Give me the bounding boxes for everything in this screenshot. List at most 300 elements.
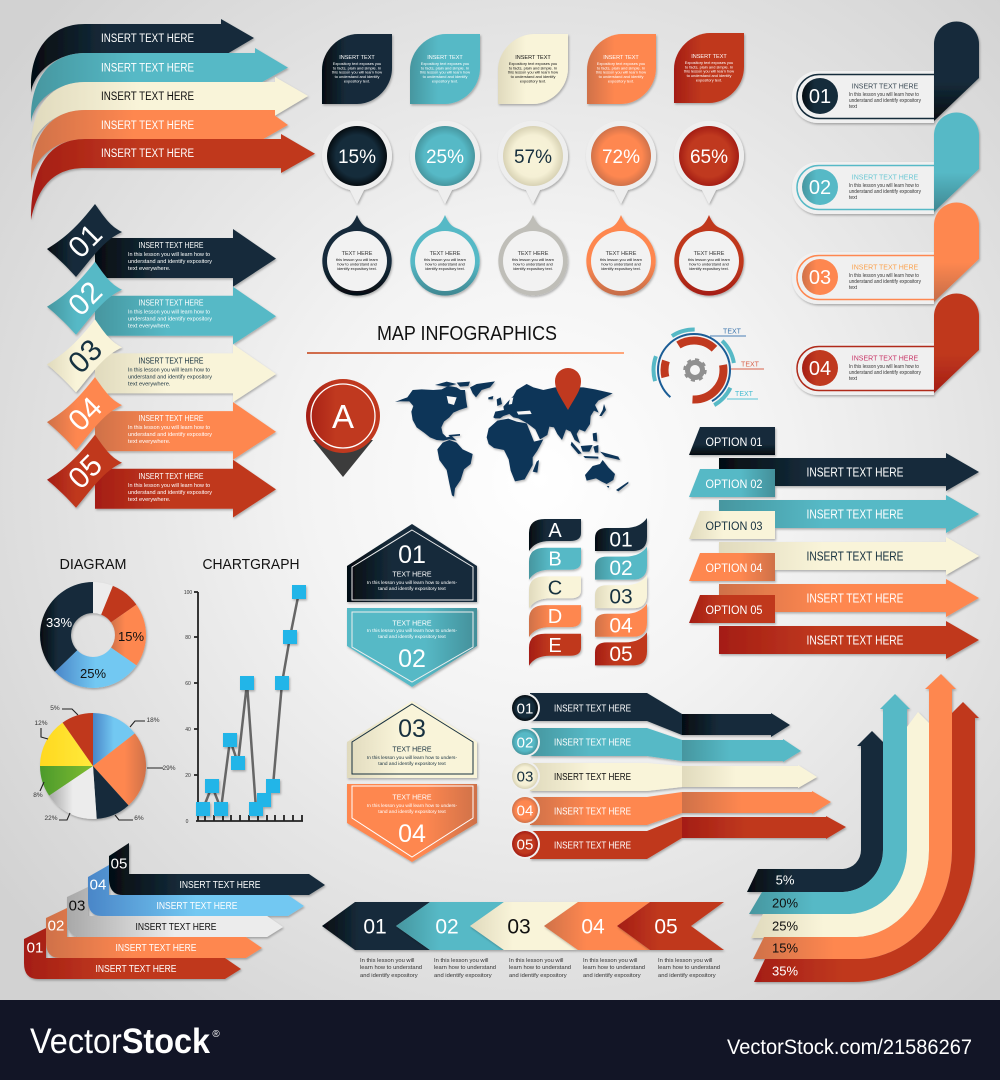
pie chart: 6%: [134, 815, 144, 822]
chevron 04: and identify expository: [583, 973, 641, 979]
ribbon 02: 02: [609, 557, 633, 580]
leaf cards row: [322, 33, 744, 104]
tag card 01: text: [849, 104, 858, 110]
hexagon 04: tand and identify expository text: [378, 809, 446, 815]
chevron 01: [322, 902, 430, 979]
folded arrow 05: 05: [111, 856, 127, 872]
option 01 tab: [689, 427, 775, 455]
leaf card orange: INSERT TEXT: [603, 55, 639, 61]
leaf card red: expository text.: [696, 78, 722, 83]
curved arrows top left: [31, 19, 315, 220]
donut chart: [40, 582, 146, 688]
pin 72%: [586, 121, 656, 204]
numbered arrow 04: In this lesson you will learn how to: [128, 425, 210, 431]
leaf card navy: to facts, plain and simple. In: [333, 65, 381, 70]
chevron 05: [617, 902, 724, 979]
hexagon 04: In this lesson you will learn how to unders-: [367, 803, 457, 809]
donut chart: 33%: [46, 615, 72, 630]
up arrow cream 25%: [751, 712, 933, 938]
hexagon 04: [347, 784, 477, 862]
folded arrow 04: [88, 865, 304, 916]
ring callouts row: [322, 215, 744, 296]
hexagon 04: TEXT HERE: [392, 794, 432, 802]
heading: diagram: DIAGRAM: [60, 556, 126, 573]
leaf card cream: Expository text exposes you: [509, 61, 557, 66]
option 01 tab: OPTION 01: [706, 435, 763, 449]
folded arrow 05: INSERT TEXT HERE: [180, 879, 260, 891]
folded arrow 01: 01: [27, 940, 43, 956]
leaf card teal: [410, 34, 480, 104]
gauge diagram: [654, 328, 764, 410]
ring callout teal: how to understand and: [425, 262, 465, 266]
heading: chartgraph: CHARTGRAPH: [202, 556, 300, 573]
option arrow 1: INSERT TEXT HERE: [806, 466, 904, 480]
pie chart: 8%: [33, 792, 43, 799]
bar arrow 04: [510, 791, 831, 825]
bar arrow 02: [510, 727, 801, 762]
up arrow navy 5%: 5%: [776, 872, 795, 888]
numbered arrow 02: understand and identify expository: [128, 317, 212, 323]
up arrow orange 15%: 15%: [772, 940, 798, 956]
line chart: 40: [185, 727, 191, 733]
chevron 04: learn how to understand: [583, 965, 645, 971]
ribbon 01: 01: [609, 528, 633, 552]
stepped folded arrows bottom left: [24, 843, 325, 979]
numbered arrow 04: 04: [62, 391, 109, 438]
pin 72%: 72%: [602, 147, 640, 168]
up arrow teal 20%: [749, 694, 910, 914]
donut chart: 15%: [118, 629, 144, 644]
gauge label lines and text: TEXT: [723, 328, 742, 336]
ribbon 05: 05: [609, 643, 633, 666]
tag card 01: [792, 22, 979, 123]
stepped bar arrows: [510, 693, 846, 859]
arrow orange: [31, 110, 288, 185]
hexagon 03: TEXT HERE: [392, 746, 432, 754]
option 04 tab: OPTION 04: [706, 561, 763, 575]
numbered arrow 05: INSERT TEXT HERE: [138, 471, 204, 481]
ring callout red: how to understand and: [689, 262, 729, 266]
ring callout orange: [586, 215, 656, 296]
pin 25%: [410, 121, 480, 204]
numbered arrow 02: INSERT TEXT HERE: [138, 298, 204, 308]
arrow teal: INSERT TEXT HERE: [101, 62, 194, 74]
tag card 04: In this lesson you will learn how to: [849, 364, 919, 370]
option arrows right: [689, 427, 979, 659]
line chart: 20: [185, 773, 191, 779]
curved up arrows: [747, 674, 979, 982]
folded arrow 02: [46, 908, 262, 958]
leaf card cream: INSERT TEXT: [515, 55, 551, 61]
chevron 01: 01: [363, 916, 387, 938]
ribbon 01: [595, 518, 647, 552]
up arrow teal 20%: 20%: [772, 896, 798, 910]
world map: [395, 381, 628, 499]
option arrow 1: [719, 453, 979, 491]
leaf card orange: to facts, plain and simple. In: [597, 65, 645, 70]
donut chart: 25%: [80, 666, 106, 681]
gauge label lines and text: TEXT: [741, 362, 760, 368]
folded arrow 04: 04: [90, 876, 106, 894]
arrow orange: INSERT TEXT HERE: [101, 120, 194, 132]
bar arrow 03: 03: [517, 768, 533, 786]
numbered arrow 02: 02: [62, 275, 109, 322]
leaf card navy: Expository text exposes you: [333, 61, 381, 66]
leaf card navy: this lesson you will learn how: [332, 70, 382, 75]
numbered arrow 05: understand and identify expository: [128, 490, 212, 496]
chevron 02: In this lesson you will: [434, 958, 488, 964]
leaf card cream: expository text.: [520, 79, 546, 84]
arrow red: [31, 134, 315, 220]
ribbon E: [529, 634, 581, 666]
pin 57%: 57%: [514, 147, 552, 168]
line chart: 80: [185, 635, 191, 641]
tag card 03: understand and identify expository: [849, 279, 921, 285]
numbered arrows left: [47, 204, 276, 518]
hexagon 01: TEXT HERE: [392, 572, 432, 578]
up arrow orange 15%: [753, 674, 956, 959]
hexagon 01: In this lesson you will learn how to unders-: [367, 580, 457, 586]
chevron 02: [396, 902, 504, 979]
hexagon 04: 04: [398, 820, 426, 848]
numbered arrow 01: In this lesson you will learn how to: [128, 252, 210, 258]
tag card 04: [792, 294, 979, 395]
tag card 04: INSERT TEXT HERE: [852, 356, 919, 362]
ring callout navy: how to understand and: [337, 262, 377, 266]
up arrow cream 25%: 25%: [772, 918, 798, 934]
bar arrow 02: INSERT TEXT HERE: [554, 738, 631, 748]
tag card 01: In this lesson you will learn how to: [849, 92, 919, 98]
bar arrow 05: INSERT TEXT HERE: [554, 840, 631, 852]
chevron 01: learn how to understand: [360, 965, 422, 971]
map section title: MAP INFOGRAPHICS: [377, 323, 557, 345]
hexagon 03: In this lesson you will learn how to unders-: [367, 755, 457, 761]
leaf card teal: expository text.: [432, 79, 458, 84]
chevron timeline: [322, 902, 724, 979]
ring callout red: TEXT HERE: [694, 251, 725, 257]
ring callout grey: this lesson you will learn: [512, 257, 554, 262]
option 04 tab: [689, 553, 775, 581]
option 05 tab: [689, 595, 775, 623]
tag card 01: 01: [809, 86, 831, 108]
ribbon E: E: [548, 635, 562, 657]
arrow cream: [31, 77, 308, 155]
ribbon A: A: [548, 520, 562, 542]
option arrow 5: [719, 621, 979, 659]
leaf card teal: this lesson you will learn how: [420, 70, 470, 75]
option arrow 4: [719, 579, 979, 617]
option arrow 2 text and tab 03: [689, 508, 904, 539]
ring callout grey: [498, 215, 568, 296]
ring callout navy: [322, 215, 392, 296]
leaf card cream: to facts, plain and simple. In: [509, 65, 557, 70]
hexagon 02: [347, 608, 477, 687]
ribbon D: D: [548, 606, 562, 628]
chevron 05: learn how to understand: [658, 965, 720, 971]
ring callout orange: TEXT HERE: [606, 251, 637, 257]
chevron 05: 05: [654, 916, 678, 938]
leaf card navy: [322, 34, 392, 104]
tag card 03: INSERT TEXT HERE: [852, 264, 919, 272]
ring callout orange: this lesson you will learn: [600, 257, 642, 262]
numbered arrow 04: understand and identify expository: [128, 432, 212, 438]
numbered arrow 03: INSERT TEXT HERE: [138, 355, 204, 365]
line chart: 60: [185, 681, 191, 687]
tag card 02: 02: [809, 177, 831, 199]
numbered arrow 01: understand and identify expository: [128, 259, 212, 265]
bar arrow 04: 04: [517, 802, 533, 820]
leaf card orange: expository text.: [608, 79, 634, 84]
leaf card cream: to understand and identify: [511, 74, 555, 79]
line chart: 0: [186, 819, 189, 825]
ring callout grey: identify expository text.: [513, 266, 553, 271]
leaf card cream: this lesson you will learn how: [508, 70, 558, 75]
leaf card navy: to understand and identify: [335, 74, 379, 79]
pie chart: 29%: [162, 765, 176, 772]
numbered arrow 03: In this lesson you will learn how to: [128, 367, 210, 373]
ring callout grey: TEXT HERE: [518, 251, 549, 257]
line chart: 100: [184, 590, 192, 596]
leaf card red: this lesson you will learn how: [684, 69, 734, 74]
tag card 04: 04: [809, 358, 831, 380]
tag card 02: understand and identify expository: [849, 189, 921, 195]
tag card 02: [792, 112, 979, 214]
numbered arrow 02: text everywhere.: [128, 324, 171, 330]
arrow cream: INSERT TEXT HERE: [101, 91, 194, 103]
hexagon 03: [347, 701, 477, 778]
ring callout navy: this lesson you will learn: [336, 257, 378, 262]
letter ribbons: [529, 519, 581, 666]
bar arrow 05: [510, 816, 846, 859]
pie chart: 18%: [146, 717, 160, 724]
ring callout grey: how to understand and: [513, 262, 553, 266]
ribbon B: [529, 548, 581, 580]
tag card 02: In this lesson you will learn how to: [849, 183, 919, 189]
ribbon C: [529, 576, 581, 608]
chevron 05: In this lesson you will: [658, 958, 712, 964]
footer bar: [0, 1000, 1000, 1080]
leaf card red: [674, 33, 744, 103]
tag cards right: [792, 22, 979, 395]
leaf card red: INSERT TEXT: [691, 54, 727, 60]
numbered arrow 03: [47, 319, 276, 402]
folded arrow 01: [24, 928, 241, 979]
chevron 05: and identify expository: [658, 973, 716, 979]
chevron 04: In this lesson you will: [583, 958, 637, 964]
up arrow red 35%: [754, 702, 979, 982]
gauge label lines and text: TEXT: [735, 391, 754, 398]
folded arrow 01: INSERT TEXT HERE: [96, 963, 176, 975]
up arrow navy 5%: [747, 731, 883, 892]
ring callout teal: this lesson you will learn: [424, 257, 466, 262]
pin 15%: [322, 121, 392, 204]
ring callout teal: identify expository text.: [425, 266, 465, 271]
ribbon 04: [595, 604, 647, 637]
pin 15%: 15%: [338, 147, 376, 168]
ribbon B: B: [548, 549, 562, 571]
ring callout navy: identify expository text.: [337, 266, 377, 271]
hexagon 03: tand and identify expository text: [378, 761, 446, 767]
location pin A: [306, 379, 380, 477]
arrow navy: [31, 19, 254, 95]
tag card 04: text: [849, 376, 858, 382]
chevron 04: [544, 902, 650, 979]
ribbon D: [529, 605, 581, 637]
hexagon 01: [347, 524, 477, 602]
pin 57%: [498, 121, 568, 204]
hexagon 02: TEXT HERE: [392, 620, 432, 628]
arrow navy: INSERT TEXT HERE: [101, 33, 194, 45]
pin 65%: 65%: [690, 147, 728, 168]
chevron 02: learn how to understand: [434, 965, 496, 971]
hexagon 01: 01: [398, 541, 426, 569]
pie chart: 5%: [50, 705, 60, 712]
footer url: VectorStock.com/21586267: [727, 1036, 972, 1059]
ribbon 03: 03: [609, 586, 633, 609]
folded arrow 03: [67, 887, 283, 937]
tag card 02: INSERT TEXT HERE: [852, 174, 919, 182]
leaf card teal: Expository text exposes you: [421, 61, 469, 66]
numbered arrow 01: INSERT TEXT HERE: [138, 240, 204, 250]
ring callout orange: identify expository text.: [601, 266, 641, 271]
folded arrow 05: [109, 843, 325, 895]
ribbon 05: [595, 632, 647, 666]
hexagon 02: 02: [398, 645, 426, 673]
option 05 tab: OPTION 05: [706, 603, 763, 617]
option 02 tab: [689, 469, 775, 497]
tag card 01: understand and identify expository: [849, 98, 921, 104]
option arrow 4: INSERT TEXT HERE: [806, 592, 904, 606]
ring callout red: this lesson you will learn: [688, 257, 730, 262]
leaf card red: to facts, plain and simple. In: [685, 64, 733, 69]
folded arrow 03: 03: [69, 898, 85, 914]
tag card 03: text: [849, 285, 858, 291]
numbered arrow 05: text everywhere.: [128, 497, 171, 503]
chevron 03: 03: [507, 916, 531, 938]
bar arrow 04: INSERT TEXT HERE: [554, 806, 631, 818]
chevron 03: learn how to understand: [509, 965, 571, 971]
ribbon 02: [595, 547, 647, 580]
bar arrow 01: [510, 693, 790, 737]
option arrow 5: INSERT TEXT HERE: [806, 634, 904, 648]
ring callout orange: how to understand and: [601, 262, 641, 266]
leaf card orange: this lesson you will learn how: [596, 70, 646, 75]
tag card 03: 03: [809, 267, 831, 289]
folded arrow 02: 02: [48, 918, 64, 934]
line chart: [184, 585, 306, 825]
footer registered mark: ®: [212, 1029, 220, 1040]
chevron 01: In this lesson you will: [360, 958, 414, 964]
hexagon 02: In this lesson you will learn how to unders-: [367, 628, 457, 634]
option 02 tab: OPTION 02: [706, 477, 763, 491]
hexagon 03: 03: [398, 715, 426, 743]
pie chart: 12%: [34, 720, 48, 727]
leaf card orange: to understand and identify: [599, 74, 643, 79]
numbered arrow 03: 03: [62, 333, 109, 380]
leaf card teal: INSERT TEXT: [427, 55, 463, 61]
footer logo: VectorStock: [30, 1022, 210, 1061]
numbered arrow 04: text everywhere.: [128, 439, 171, 445]
ring callout navy: TEXT HERE: [342, 251, 373, 257]
arrow teal: [31, 48, 288, 125]
option arrow 2 text and tab 03: INSERT TEXT HERE: [806, 508, 904, 522]
numbered arrow 04: INSERT TEXT HERE: [138, 413, 204, 423]
numbered arrow 03: understand and identify expository: [128, 374, 212, 380]
chevron 03: In this lesson you will: [509, 958, 563, 964]
option arrow 3: INSERT TEXT HERE: [806, 550, 904, 564]
tag card 02: text: [849, 195, 858, 201]
numbered arrow 03: text everywhere.: [128, 381, 171, 387]
chevron 02: and identify expository: [434, 973, 492, 979]
ribbon 03: [595, 575, 647, 609]
tag card 03: In this lesson you will learn how to: [849, 273, 919, 279]
option arrow 3: [719, 537, 979, 575]
chevron 02: 02: [435, 916, 459, 938]
ribbon 04: 04: [609, 614, 633, 637]
leaf card orange: [587, 34, 656, 104]
leaf card red: to understand and identify: [687, 73, 731, 78]
arrow red: INSERT TEXT HERE: [101, 148, 194, 160]
numbered arrow 05: [47, 435, 276, 518]
leaf card navy: INSERT TEXT: [339, 55, 375, 61]
bar arrow 05: 05: [517, 836, 533, 854]
numbered arrow 05: In this lesson you will learn how to: [128, 483, 210, 489]
leaf card red: Expository text exposes you: [685, 60, 733, 65]
leaf card teal: to understand and identify: [423, 74, 467, 79]
tag card 03: [792, 202, 979, 304]
numbered arrow 01: text everywhere.: [128, 266, 171, 272]
numbered arrow 04: [47, 377, 276, 460]
ribbon A: [529, 519, 581, 551]
chevron 03: and identify expository: [509, 973, 567, 979]
numbered arrow 02: In this lesson you will learn how to: [128, 310, 210, 316]
leaf card orange: Expository text exposes you: [597, 61, 645, 66]
icon: gear: [684, 360, 706, 380]
folded arrow 03: INSERT TEXT HERE: [136, 921, 216, 933]
pie chart: 22%: [44, 815, 58, 822]
bar arrow 03: INSERT TEXT HERE: [554, 772, 631, 783]
bar arrow 02: 02: [517, 734, 533, 752]
hexagon 01: tand and identify expository text: [378, 586, 446, 592]
location pin A: A: [332, 398, 354, 435]
pin 65%: [674, 121, 744, 204]
percentage pins row: [322, 121, 744, 204]
chevron 04: 04: [581, 916, 605, 938]
map marker pin: [555, 368, 581, 410]
ring callout teal: [410, 215, 480, 296]
bar arrow 01: INSERT TEXT HERE: [554, 704, 631, 714]
numbered arrow 01: 01: [62, 218, 109, 265]
pin 25%: 25%: [426, 147, 464, 168]
numbered arrow 05: 05: [62, 449, 109, 496]
bar arrow 01: 01: [517, 700, 533, 718]
ring callout teal: TEXT HERE: [430, 251, 461, 257]
ring callout red: [674, 215, 744, 296]
folded arrow 04: INSERT TEXT HERE: [156, 900, 238, 912]
chevron 03: [470, 902, 578, 979]
numbered arrow 01: [47, 204, 276, 287]
number ribbons: [595, 518, 647, 666]
option arrow 2 text and tab 03: OPTION 03: [706, 519, 763, 533]
ribbon C: C: [548, 577, 562, 599]
leaf card teal: to facts, plain and simple. In: [421, 65, 469, 70]
chevron 01: and identify expository: [360, 973, 418, 979]
leaf card cream: [498, 34, 568, 104]
gauge label lines and text: [710, 328, 764, 399]
pie chart: [33, 705, 176, 822]
tag card 04: understand and identify expository: [849, 370, 921, 376]
hexagon 02: tand and identify expository text: [378, 634, 446, 640]
